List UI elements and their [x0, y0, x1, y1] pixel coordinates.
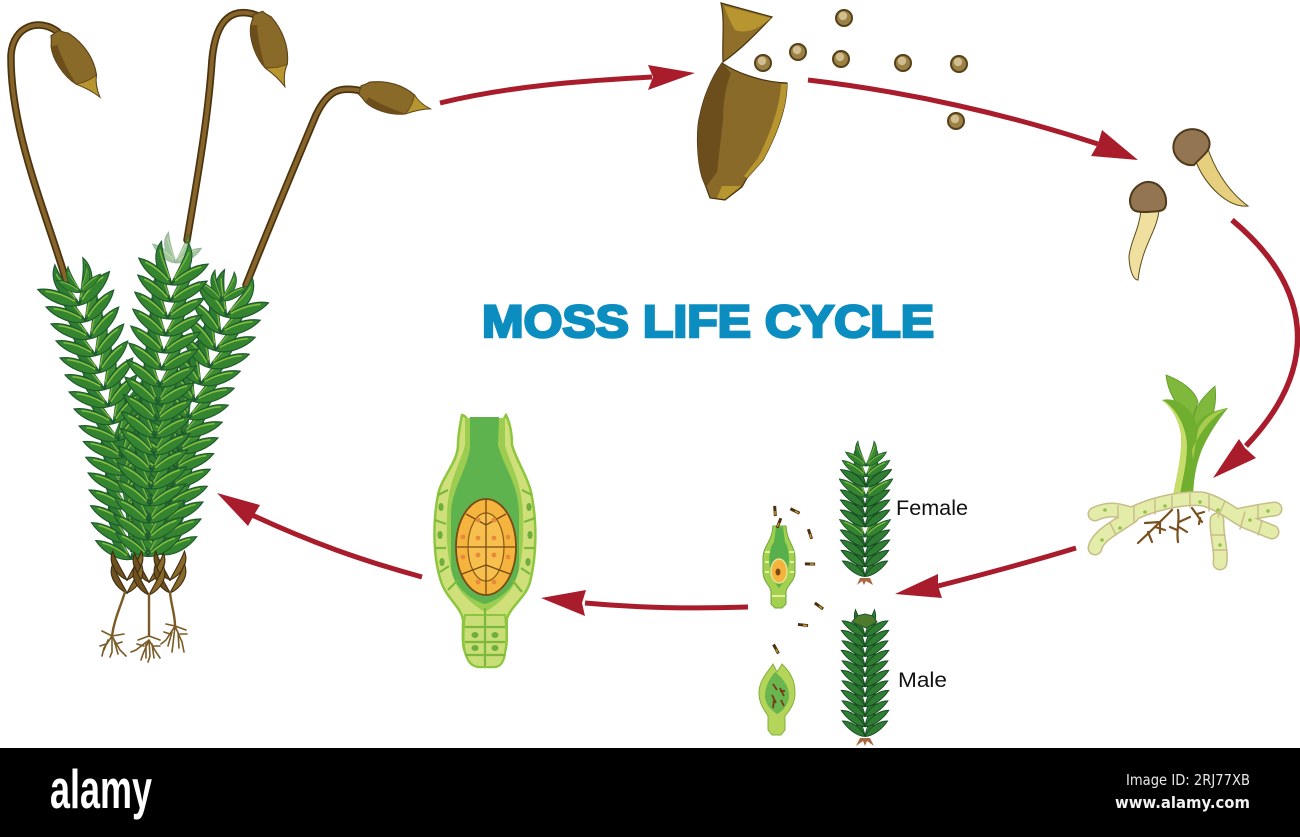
central canal	[451, 417, 519, 604]
germinating spore upper	[1173, 129, 1248, 206]
arrow: mature moss to capsule	[440, 65, 695, 103]
sperm in antheridium	[772, 684, 785, 708]
small antheridium	[759, 664, 795, 735]
capsule body	[698, 63, 787, 200]
roots of male plant	[856, 738, 874, 746]
capsule right	[356, 76, 434, 123]
open capsule	[698, 3, 787, 200]
small archegonium with sperm	[763, 526, 795, 608]
arrow: archegonium to mature moss	[217, 493, 422, 577]
swimming sperm	[772, 506, 824, 653]
male gametophyte	[841, 610, 889, 746]
egg cell	[771, 559, 787, 583]
male antheridial head	[852, 614, 877, 628]
wall cell divisions and nuclei	[435, 490, 535, 666]
shoot leaves and stem	[1162, 375, 1228, 496]
rhizoids	[1138, 508, 1204, 543]
arrow: germination to young shoot	[1213, 220, 1298, 478]
protonema filaments	[1095, 494, 1275, 563]
capsule left	[42, 24, 113, 106]
footer image id: Image ID: 2RJ77XB	[1126, 771, 1250, 789]
label: Male: Male	[898, 669, 947, 692]
pale new leaves at tip of middle shoot	[151, 231, 203, 265]
female gametophyte	[839, 441, 893, 585]
large archegonium with embryo	[434, 415, 535, 667]
label: Female: Female	[896, 497, 968, 520]
rhizoid roots	[100, 592, 187, 662]
embryo	[456, 499, 516, 595]
middle leafy shoot	[113, 239, 210, 558]
title: MOSS LIFE CYCLE	[482, 296, 934, 347]
young shoot on protonema	[1095, 375, 1275, 563]
capsule lid	[721, 3, 772, 62]
arrow: young shoot to gametophytes	[895, 548, 1076, 598]
mature moss plant with sporophytes	[11, 8, 434, 662]
germinating spore lower	[1129, 182, 1166, 280]
arrow: spores to germination	[808, 80, 1138, 160]
left leafy shoot	[33, 252, 163, 563]
germinating spores	[1129, 129, 1248, 280]
merged lower foliage backing	[112, 370, 192, 552]
footer website: www.alamy.com	[1115, 793, 1250, 812]
capsule middle	[243, 8, 300, 92]
roots of female plant	[857, 578, 873, 585]
archegonium outer wall	[434, 415, 535, 667]
spores	[755, 10, 967, 129]
sporophyte stalks	[11, 13, 362, 285]
lower stalk cells	[464, 615, 506, 667]
brown leaf bases	[111, 551, 186, 595]
footer logo: alamy	[50, 758, 152, 820]
right leafy shoot	[129, 263, 274, 559]
inner green wall band	[447, 418, 523, 612]
arrow: gametophytes to archegonium	[541, 590, 748, 616]
footer bar	[0, 748, 1300, 837]
